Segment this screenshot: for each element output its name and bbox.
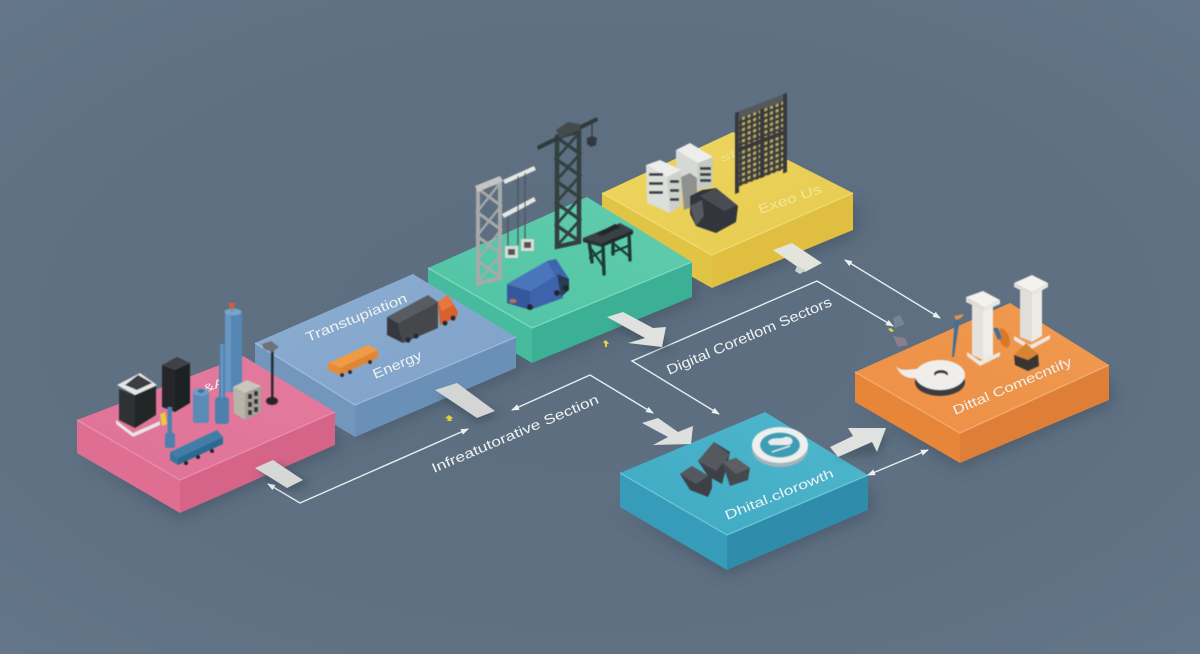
icons: orange platform pillars and disc: [896, 275, 1050, 396]
label: yellow partial: st: [719, 148, 738, 165]
panel: teal platform: [620, 412, 868, 570]
label: pink partial: &A: [201, 376, 227, 396]
icons: green platform towers and truck: [475, 117, 633, 310]
panel: green platform: [428, 197, 692, 363]
arrow: yellow flat: [773, 243, 822, 274]
arrow: teal outgoing: [830, 428, 890, 458]
label: digital growth: Dhital.clorowth: [723, 465, 836, 523]
marker: faded items near orange: [893, 315, 908, 347]
arrow: pink flat: [255, 460, 310, 492]
arrow: green big: [607, 312, 672, 350]
panel: yellow platform: [602, 132, 853, 288]
label: digital connectivity: Dittal Comecntify: [950, 354, 1075, 418]
label: infrastructure section: Infreatutorative Section: [429, 392, 601, 476]
label: yellow platform: Exeo Us: [756, 181, 824, 217]
arrow: teal incoming: [642, 418, 693, 445]
icons: teal platform blocks and ring: [680, 427, 808, 497]
icons: blue platform vehicles: [328, 295, 458, 377]
markers: small yellow: [445, 328, 894, 421]
label: digital sectors: Digital Coretlom Sectors: [664, 293, 834, 378]
icons: pink platform objects: [116, 303, 279, 465]
panel: orange platform: [855, 303, 1109, 463]
icons: yellow platform buildings and gate: [646, 93, 787, 233]
connector lines: [268, 260, 940, 503]
arrow: blue flat: [435, 383, 500, 424]
label: energy: Energy: [370, 348, 424, 382]
panel: pink platform: [77, 356, 335, 513]
label: transportation: Transtupiation: [304, 290, 409, 345]
slab shadows: [77, 200, 1114, 575]
panel: blue platform: [255, 274, 516, 437]
